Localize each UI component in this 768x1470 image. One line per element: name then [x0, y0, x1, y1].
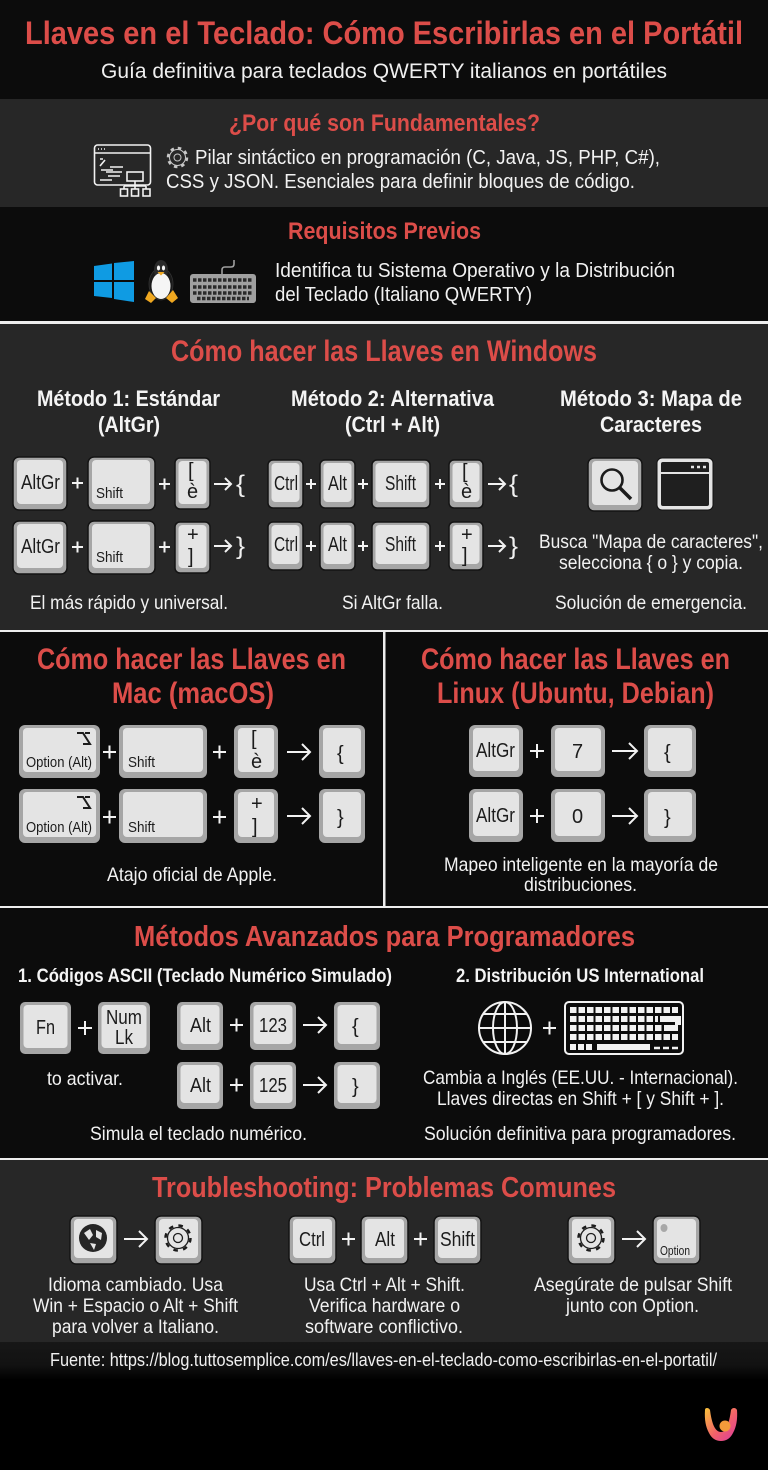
text: linux note: Mapeo inteligente en la mayoría de	[444, 854, 718, 876]
method 2 open brace shortcut: è	[461, 481, 472, 503]
alt 123 shortcut: {	[352, 1016, 359, 1038]
method 3 heading: Método 3: Mapa de	[560, 386, 742, 411]
text: option issue: junto con Option.	[565, 1295, 699, 1317]
mac open brace shortcut: Shift	[128, 754, 156, 771]
subheading: us international: 2. Distribución US International	[456, 966, 704, 987]
alt 125 shortcut	[177, 1062, 380, 1109]
heading: windows: Cómo hacer las Llaves en Windows	[171, 335, 597, 368]
linux open brace shortcut: {	[664, 742, 671, 764]
method 2 close brace shortcut: ]	[462, 545, 468, 567]
text: ascii note: Simula el teclado numérico.	[90, 1123, 307, 1145]
mac close brace shortcut: Shift	[128, 819, 156, 836]
icon: code window	[94, 145, 150, 196]
method 3 heading	[560, 386, 742, 437]
heading: linux	[421, 643, 730, 710]
text: hardware issue: Usa Ctrl + Alt + Shift.	[304, 1274, 465, 1296]
method 1 open brace shortcut: AltGr	[21, 472, 60, 494]
icon: grey keyboard	[190, 260, 256, 303]
panel: windows	[0, 324, 768, 630]
logo	[705, 1408, 737, 1441]
mac close brace shortcut: ]	[252, 816, 258, 838]
mac open brace shortcut: Option (Alt)	[26, 754, 92, 771]
linux close brace shortcut: AltGr	[476, 805, 515, 827]
text: why line 2: CSS y JSON. Esenciales para definir bloques de código.	[166, 170, 635, 193]
text: mac note: Atajo oficial de Apple.	[107, 864, 277, 886]
method 2 close brace shortcut: Ctrl	[274, 534, 298, 556]
linux open brace shortcut: 7	[572, 741, 583, 763]
language to settings icons	[70, 1216, 202, 1264]
linux close brace shortcut: 0	[572, 806, 583, 828]
icon: globe	[479, 1002, 531, 1054]
ctrl alt shift keys: Shift	[440, 1229, 475, 1251]
method 3 heading: Caracteres	[600, 412, 702, 437]
text: why line 1: Pilar sintáctico en programación (C, Java, JS, PHP, C#),	[195, 146, 660, 169]
alt 125 shortcut: 125	[259, 1075, 287, 1097]
alt 123 shortcut: 123	[259, 1015, 287, 1037]
mac close brace shortcut	[19, 789, 365, 843]
ctrl alt shift keys: Ctrl	[299, 1229, 325, 1251]
ctrl alt shift keys	[289, 1216, 481, 1264]
settings to option icons	[568, 1216, 700, 1264]
icon: gear	[168, 148, 187, 167]
panel: why fundamental	[0, 99, 768, 207]
method 2 open brace shortcut: Alt	[328, 473, 347, 495]
linux close brace shortcut: }	[664, 807, 671, 829]
footer source	[0, 1342, 768, 1380]
mac close brace shortcut: }	[337, 807, 344, 829]
icon: white keyboard	[565, 1002, 683, 1054]
method 2 close brace shortcut: Alt	[328, 534, 347, 556]
plus sign	[543, 1022, 556, 1034]
method 1 close brace shortcut	[13, 521, 245, 574]
fn numlk shortcut: Fn	[36, 1017, 55, 1039]
text: requirements line 1: Identifica tu Sistema Operativo y la Distribución	[275, 259, 675, 282]
fn numlk shortcut: Num	[106, 1007, 142, 1029]
text: us international note: Solución definitiva para programadores.	[424, 1123, 736, 1145]
alt 125 shortcut: Alt	[190, 1075, 211, 1097]
panel: mac	[0, 632, 383, 906]
heading: mac	[37, 643, 346, 710]
method 2 open brace shortcut: Ctrl	[274, 473, 298, 495]
heading: advanced: Métodos Avanzados para Programadores	[134, 921, 635, 953]
method 1 open brace shortcut: è	[187, 481, 198, 503]
heading: requirements: Requisitos Previos	[288, 218, 481, 245]
fn numlk shortcut	[20, 1002, 150, 1054]
panel: requirements	[0, 207, 768, 321]
method 1 open brace shortcut: Shift	[96, 485, 124, 502]
text: language issue	[33, 1274, 239, 1338]
linux open brace shortcut: AltGr	[476, 740, 515, 762]
method 1 close brace shortcut: AltGr	[21, 536, 60, 558]
text: hardware issue	[304, 1274, 465, 1338]
text: linux note: distribuciones.	[524, 874, 637, 896]
mac close brace shortcut: +	[251, 793, 263, 815]
heading: mac: Mac (macOS)	[112, 677, 274, 710]
method 1 heading: (AltGr)	[98, 412, 160, 437]
text: to activate: to activar.	[47, 1068, 123, 1090]
icon: windows	[94, 261, 134, 302]
text: linux note	[444, 854, 718, 896]
text: method 2 note: Si AltGr falla.	[342, 592, 443, 614]
method 1 open brace shortcut	[13, 457, 245, 510]
linux open brace shortcut	[469, 725, 696, 777]
heading: mac: Cómo hacer las Llaves en	[37, 643, 346, 676]
mac close brace shortcut: Option (Alt)	[26, 819, 92, 836]
text: method 3 description	[539, 531, 763, 574]
method 2 heading: Método 2: Alternativa	[291, 386, 495, 411]
method 2 open brace shortcut: {	[509, 471, 518, 498]
text: option issue	[534, 1274, 733, 1317]
text: method 3 description: selecciona { o } y copia.	[559, 552, 743, 574]
text: language issue: Win + Espacio o Alt + Shift	[33, 1295, 239, 1317]
method 1 close brace shortcut: }	[236, 533, 245, 560]
header panel	[0, 0, 768, 99]
heading: troubleshooting: Troubleshooting: Problemas Comunes	[152, 1172, 616, 1204]
method 1 open brace shortcut: [	[188, 460, 194, 482]
text: method 1 note: El más rápido y universal.	[30, 592, 228, 614]
settings to option icons: Option	[660, 1243, 690, 1258]
text: hardware issue: software conflictivo.	[305, 1316, 463, 1338]
method 2 open brace shortcut	[268, 460, 518, 508]
method 2 open brace shortcut: Shift	[385, 473, 416, 495]
method 1 heading: Método 1: Estándar	[37, 386, 220, 411]
text: hardware issue: Verifica hardware o	[309, 1295, 460, 1317]
icon: search key	[588, 458, 642, 511]
method 1 open brace shortcut: {	[236, 471, 245, 498]
heading: why fundamental: ¿Por qué son Fundamentales?	[229, 110, 540, 137]
alt 125 shortcut: }	[352, 1076, 359, 1098]
text: method 3 note: Solución de emergencia.	[555, 592, 747, 614]
method 1 close brace shortcut: Shift	[96, 549, 124, 566]
method 1 close brace shortcut: +	[187, 524, 199, 546]
subheading: ascii: 1. Códigos ASCII (Teclado Numérico Simulado)	[18, 966, 392, 987]
text: option issue: Asegúrate de pulsar Shift	[534, 1274, 733, 1296]
subtitle: Guía definitiva para teclados QWERTY italianos en portátiles	[101, 59, 667, 83]
linux close brace shortcut	[469, 789, 696, 842]
method 2 close brace shortcut: }	[509, 533, 518, 560]
icon: linux penguin	[145, 260, 178, 303]
mac open brace shortcut: {	[337, 743, 344, 765]
ctrl alt shift keys: Alt	[375, 1229, 395, 1251]
text: language issue: Idioma cambiado. Usa	[48, 1274, 223, 1296]
method 2 heading	[291, 386, 495, 437]
method 2 heading: (Ctrl + Alt)	[345, 412, 440, 437]
mac open brace shortcut	[19, 725, 365, 778]
text: us international description	[423, 1067, 738, 1110]
panel: advanced methods	[0, 908, 768, 1158]
fn numlk shortcut: Lk	[115, 1027, 134, 1049]
panel: troubleshooting	[0, 1160, 768, 1342]
heading: linux: Linux (Ubuntu, Debian)	[437, 677, 714, 710]
panel: linux	[386, 632, 768, 906]
method 2 open brace shortcut: [	[462, 461, 468, 483]
method 2 close brace shortcut: Shift	[385, 534, 416, 556]
text: us international description: Llaves directas en Shift + [ y Shift + ].	[437, 1088, 724, 1110]
text: language issue: para volver a Italiano.	[52, 1316, 219, 1338]
icon: window key	[657, 458, 713, 510]
text: requirements line 2: del Teclado (Italiano QWERTY)	[275, 283, 532, 306]
mac open brace shortcut: [	[251, 728, 257, 750]
method 2 close brace shortcut: +	[461, 524, 473, 546]
method 1 close brace shortcut: ]	[188, 546, 194, 568]
method 1 heading	[37, 386, 220, 437]
mac open brace shortcut: è	[251, 751, 262, 773]
alt 123 shortcut: Alt	[190, 1015, 211, 1037]
alt 123 shortcut	[177, 1002, 380, 1050]
method 2 close brace shortcut	[268, 522, 518, 570]
